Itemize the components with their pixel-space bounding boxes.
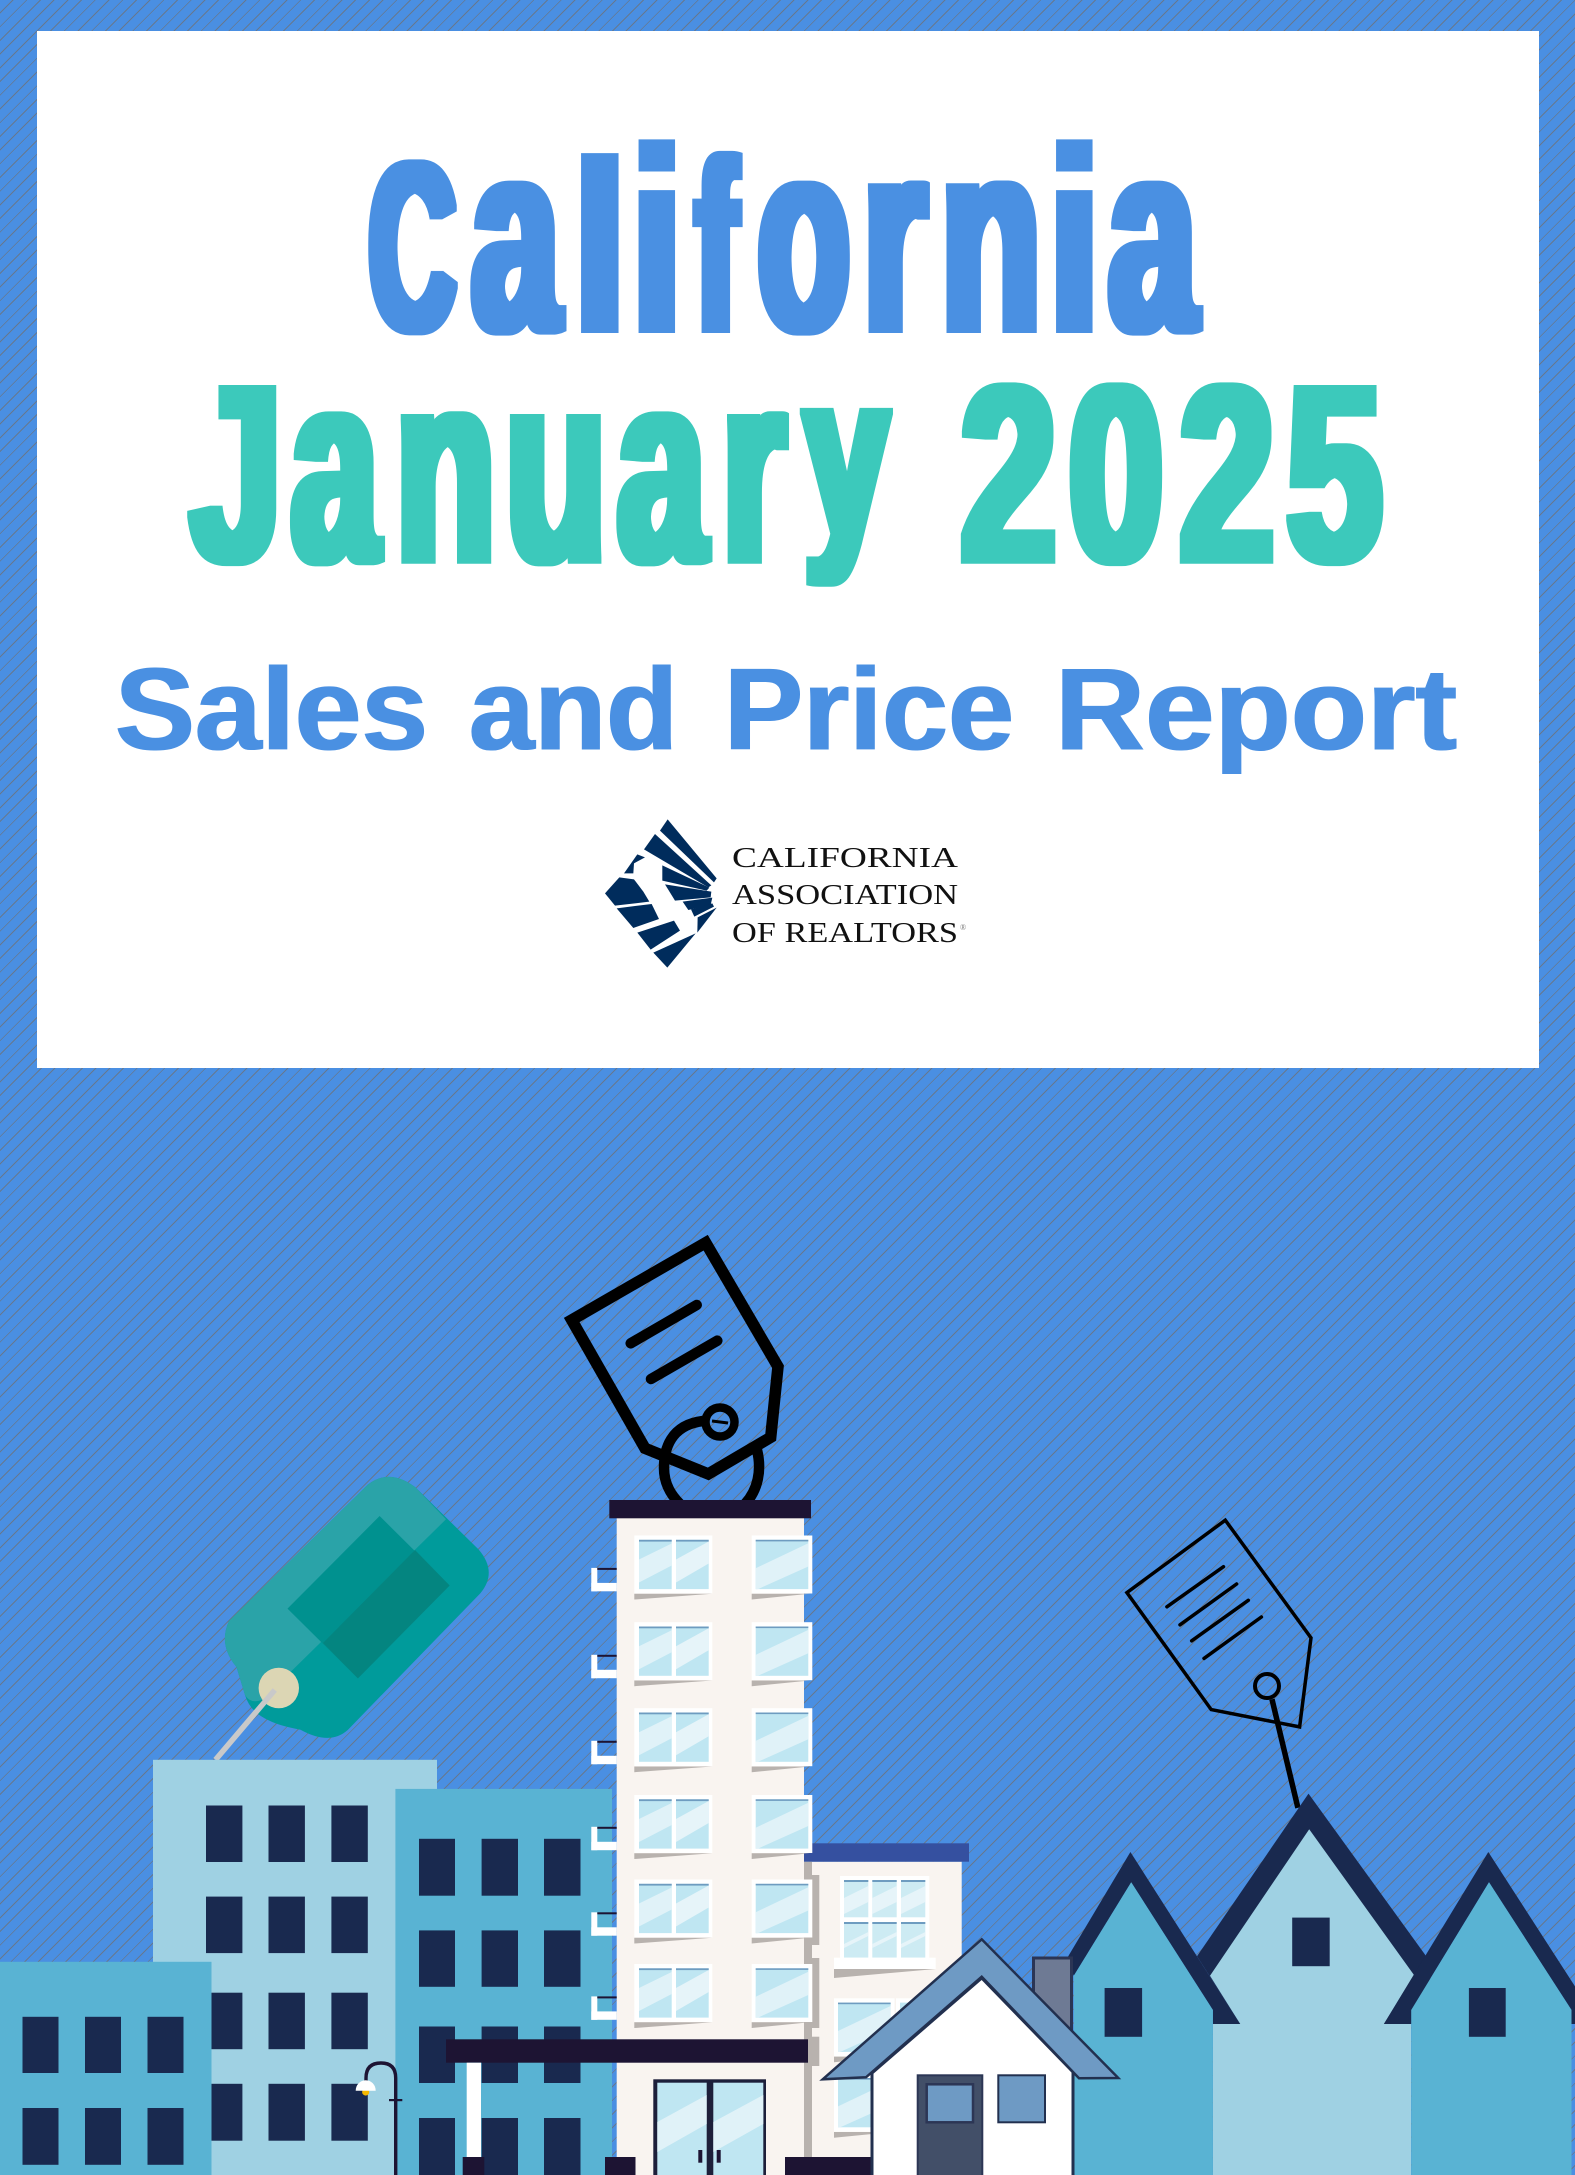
building: light blue office <box>153 1760 437 2175</box>
title: January 2025: J <box>191 335 281 615</box>
subtitle: Sales and Price Report: Sales <box>115 644 428 775</box>
title: California: C <box>369 113 455 381</box>
title: California: i <box>1050 96 1099 385</box>
icon: teal price tag <box>216 1477 489 1760</box>
title: California: r <box>863 84 926 388</box>
logo wordmark: ASSOCIATION <box>732 880 958 911</box>
icon: small outlined price tag <box>1127 1520 1311 1808</box>
multi-pane window <box>834 1876 936 1978</box>
building: teal office left <box>0 1962 212 2175</box>
balconies <box>591 1568 617 2020</box>
icon: diamond with California and rays <box>605 819 717 968</box>
house window <box>998 2075 1045 2122</box>
tower roof <box>609 1500 811 1518</box>
title: California: o <box>758 84 850 388</box>
title: California: i <box>632 96 682 385</box>
subtitle: Sales and Price Report: Price <box>724 644 1014 775</box>
house: right gabled <box>1384 1852 1575 2175</box>
icon: large black price tag <box>572 1243 778 1504</box>
house door <box>918 2075 982 2175</box>
chimney <box>1034 1958 1072 2048</box>
building: second cream building <box>804 1843 969 2175</box>
title: January 2025: y <box>804 322 888 585</box>
logo: California Association of Realtors <box>605 819 966 968</box>
panel: white title card <box>37 31 1539 1068</box>
title: January 2025: 5 <box>1287 335 1382 615</box>
house: white house front <box>823 1939 1118 2175</box>
entrance canopy <box>446 2039 808 2063</box>
title: January 2025: 2 <box>1180 335 1274 615</box>
title: California: n <box>941 84 1041 388</box>
house wall <box>872 1978 1073 2175</box>
title: January 2025: u <box>506 315 606 619</box>
title: California: l <box>574 113 626 381</box>
title: January 2025: r <box>722 315 786 619</box>
house: middle gabled <box>1197 1794 1440 2175</box>
logo wordmark: OF REALTORS <box>732 918 958 949</box>
title: California: f <box>696 111 737 382</box>
planters and feet <box>463 2157 875 2175</box>
subtitle: Sales and Price Report: Report <box>1055 644 1457 775</box>
house roof <box>823 1939 1118 2079</box>
title: January 2025: n <box>396 315 495 619</box>
logo wordmark: ® <box>960 923 966 932</box>
subtitle: Sales and Price Report: and <box>469 644 678 775</box>
canopy pillar <box>467 2063 481 2158</box>
title: California: a <box>472 84 560 388</box>
title: January 2025: 0 <box>1069 335 1163 615</box>
title: January 2025: a <box>618 315 706 619</box>
logo wordmark: CALIFORNIA <box>732 843 959 874</box>
entrance doors <box>653 2079 766 2175</box>
street lamp <box>356 2063 402 2175</box>
building: teal office right <box>395 1789 612 2175</box>
title: California: a <box>1109 84 1197 388</box>
house: left gabled <box>1066 1852 1240 2175</box>
building: tower <box>446 1500 875 2175</box>
title: January 2025: a <box>291 315 379 619</box>
tower windows <box>634 1536 812 2028</box>
logo wordmark <box>732 843 966 949</box>
title: January 2025: 2 <box>961 335 1056 615</box>
